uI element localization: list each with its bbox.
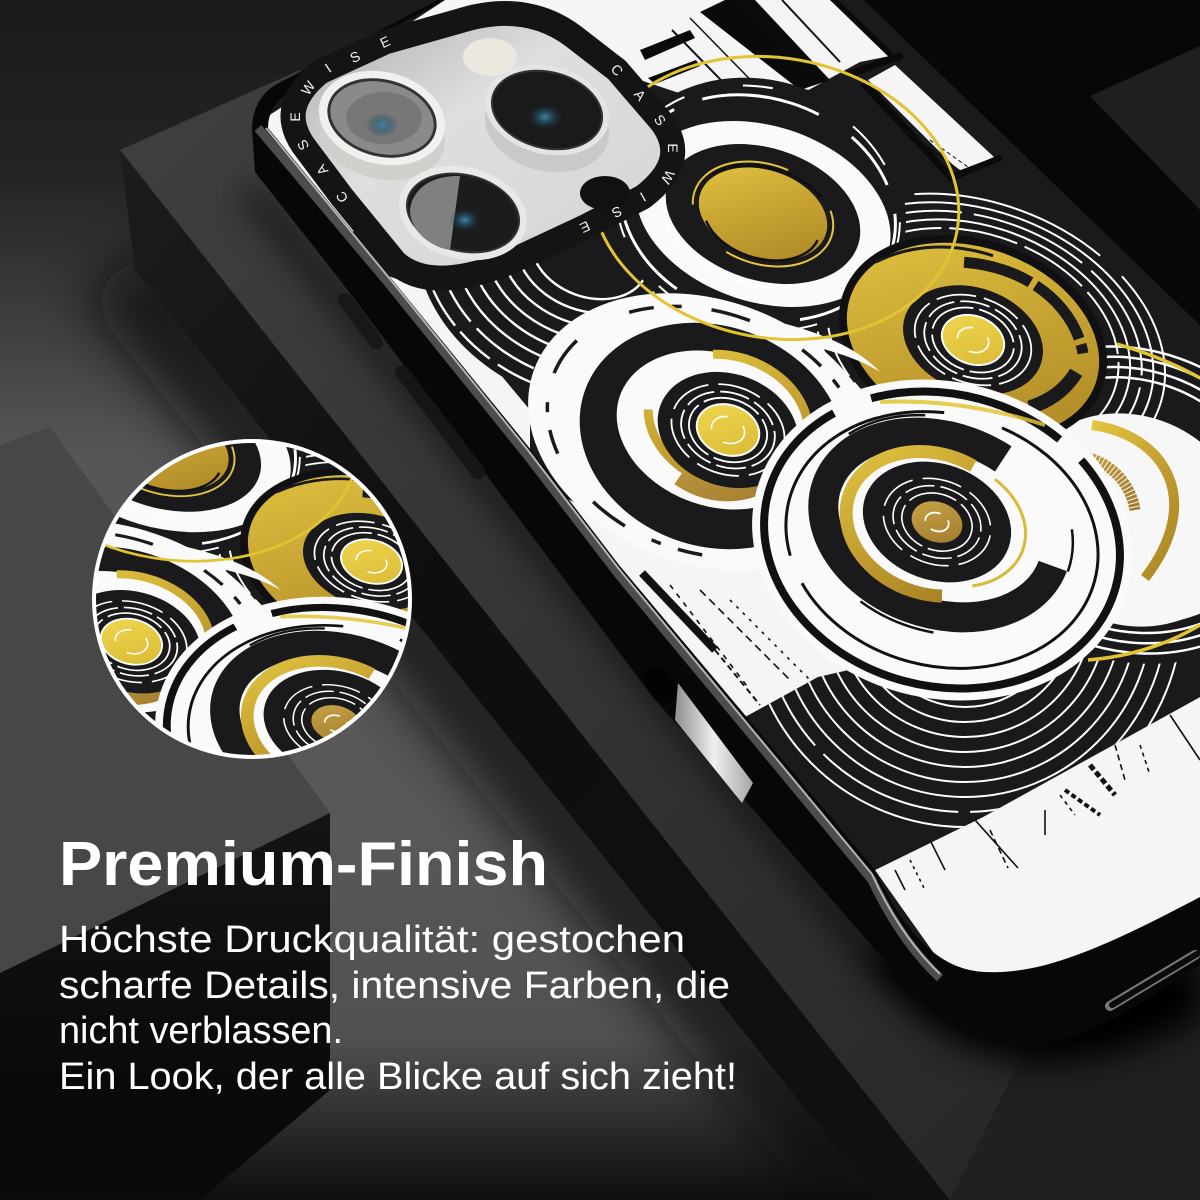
- ring lettering: CASEWISE right: A: [631, 86, 650, 104]
- black top stripes: [640, 0, 1003, 182]
- body text: Höchste Druckqualität: gestochen: [59, 919, 685, 961]
- title: Premium-Finish: [59, 830, 548, 899]
- splatter: [642, 573, 1200, 890]
- phone shadow: [250, 190, 1200, 1062]
- ring lettering: CASEWISE left: [287, 33, 393, 206]
- ring lettering: CASEWISE left: S: [294, 137, 312, 153]
- ring lettering: CASEWISE right: E: [665, 143, 681, 153]
- swirl ring right with grid lines: [740, 143, 1200, 715]
- ring lettering: CASEWISE right: I: [637, 189, 649, 205]
- ring lettering: CASEWISE right: S: [651, 111, 669, 129]
- lens: top right: [475, 52, 619, 185]
- icon: flash: [463, 38, 517, 76]
- ring lettering: CASEWISE left: S: [347, 48, 363, 66]
- charging port: [1110, 954, 1197, 1006]
- ring lettering: CASEWISE left: C: [332, 188, 351, 206]
- ring lettering: CASEWISE left: E: [377, 33, 393, 51]
- thin rings top right: [740, 143, 1200, 537]
- ring lettering: CASEWISE right: W: [657, 167, 678, 187]
- swirl circle middle: [489, 246, 921, 618]
- swirl circle right with gold: [809, 199, 1137, 481]
- body text: [59, 919, 737, 1098]
- phone print artwork: [262, 0, 1200, 990]
- side buttons: [345, 300, 753, 803]
- white paint patches: [262, 0, 1200, 990]
- ring lettering: CASEWISE left: E: [287, 112, 303, 122]
- body text: scharfe Details, intensive Farben, die: [59, 965, 730, 1007]
- lines ring upper-left: [426, 262, 655, 384]
- lens: top left: [309, 58, 455, 193]
- body text: Ein Look, der alle Blicke auf sich zieht!: [59, 1056, 737, 1098]
- camera island: [287, 14, 681, 278]
- ring lettering: CASEWISE left: I: [322, 60, 334, 76]
- ring lettering: CASEWISE right: [577, 61, 681, 236]
- phone case body: [252, 0, 1200, 1046]
- body text: nicht verblassen.: [59, 1010, 343, 1052]
- swirl circle front: [716, 338, 1168, 742]
- icon: sensor hole: [580, 176, 630, 210]
- ring lettering: CASEWISE right: S: [609, 203, 625, 221]
- lines ring lower: [746, 657, 1200, 870]
- ring lettering: CASEWISE left: W: [298, 77, 319, 98]
- ring lettering: CASEWISE left: A: [312, 161, 331, 178]
- magnified detail circle: [92, 439, 412, 759]
- gold arcs right: [880, 344, 1200, 660]
- ring lettering: CASEWISE right: E: [577, 218, 593, 236]
- thin gold circle: [568, 28, 982, 368]
- ring lettering: CASEWISE right: C: [608, 61, 626, 79]
- lens: bottom: [389, 153, 537, 273]
- swirl circle top: [576, 40, 940, 376]
